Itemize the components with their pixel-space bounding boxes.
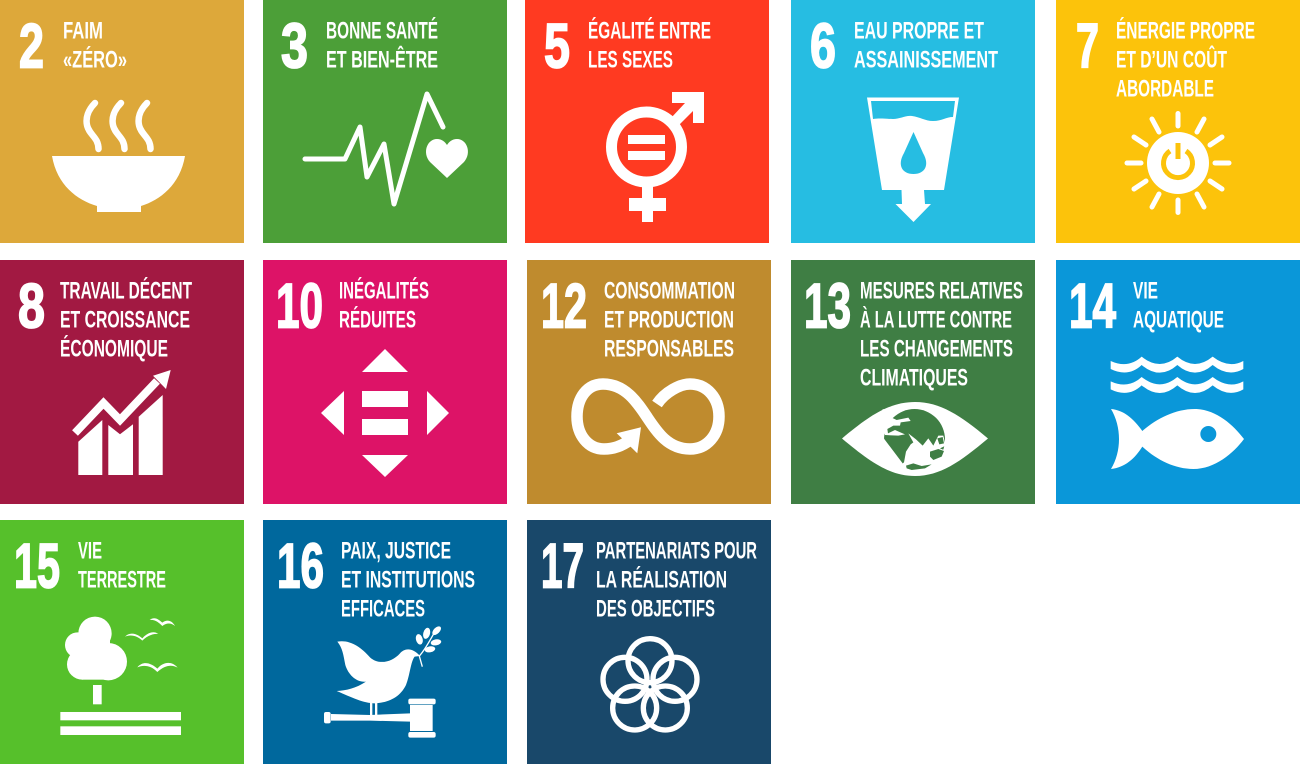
heading goal 17 (596, 538, 757, 622)
panel: goal 16 (263, 520, 507, 764)
heading goal 6: ASSAINISSEMENT (854, 46, 998, 74)
panel: goal 2 (0, 0, 244, 243)
icon: reduced inequalities arrows (321, 349, 449, 477)
panel: goal 17 (527, 520, 771, 764)
heading goal 12 (604, 278, 735, 362)
icon: heartbeat (305, 94, 468, 204)
panel: goal 8 (0, 260, 244, 504)
panel: goal 3 (263, 0, 507, 243)
heading goal 12: ET PRODUCTION (604, 306, 734, 334)
number 15: 15 (14, 532, 60, 602)
number 14: 14 (1069, 272, 1116, 342)
icon: growth chart (75, 370, 171, 475)
heading goal 13: À LA LUTTE CONTRE (860, 306, 1012, 334)
heading goal 17: PARTENARIATS POUR (596, 538, 757, 564)
icon: tree, birds and land (60, 617, 181, 735)
number 8: 8 (18, 272, 45, 342)
panel: goal 15 (0, 520, 244, 764)
panel: goal 10 (263, 260, 507, 504)
heading goal 15: TERRESTRE (78, 566, 166, 594)
heading goal 14: VIE (1133, 278, 1158, 304)
number 3: 3 (281, 12, 308, 82)
heading goal 2: FAIM (63, 18, 103, 44)
icon: interlocking rings (603, 639, 697, 730)
number 12: 12 (541, 272, 587, 342)
heading goal 15: VIE (78, 538, 102, 564)
heading goal 12: RESPONSABLES (604, 336, 734, 362)
heading goal 7: ABORDABLE (1116, 76, 1214, 102)
number 6: 6 (810, 12, 836, 82)
heading goal 6 (854, 18, 998, 74)
panel: goal 13 (791, 260, 1035, 504)
panel: goal 12 (527, 260, 771, 504)
heading goal 5: ÉGALITÉ ENTRE (588, 16, 711, 44)
heading goal 10: RÉDUITES (339, 306, 416, 334)
icon: eye with globe (842, 402, 988, 476)
heading goal 8: ET CROISSANCE (60, 306, 190, 334)
heading goal 13: MESURES RELATIVES (860, 278, 1023, 304)
heading goal 3: ET BIEN-ÊTRE (326, 46, 438, 74)
panel: goal 5 (525, 0, 769, 243)
icon: infinity loop arrow (577, 384, 719, 453)
heading goal 15 (78, 538, 166, 594)
heading goal 13: LES CHANGEMENTS (860, 336, 1013, 362)
icon: gender equality (612, 92, 704, 222)
heading goal 13 (860, 278, 1023, 392)
heading goal 12: CONSOMMATION (604, 278, 735, 304)
number 10: 10 (276, 272, 323, 342)
heading goal 14: AQUATIQUE (1133, 306, 1224, 334)
heading goal 3: BONNE SANTÉ (326, 16, 438, 44)
heading goal 8: ÉCONOMIQUE (60, 334, 168, 362)
heading goal 17: LA RÉALISATION (596, 566, 727, 594)
heading goal 16: ET INSTITUTIONS (341, 566, 475, 594)
panel: goal 14 (1056, 260, 1300, 504)
heading goal 6: EAU PROPRE ET (854, 18, 984, 44)
heading goal 2 (63, 18, 127, 74)
heading goal 2: «ZÉRO» (63, 46, 127, 74)
icon: soup bowl (52, 103, 185, 212)
heading goal 5 (588, 16, 711, 74)
heading goal 16 (341, 538, 475, 622)
icon: sun with power button (1127, 114, 1229, 212)
heading goal 10: INÉGALITÉS (339, 276, 429, 304)
heading goal 16: PAIX, JUSTICE (341, 538, 451, 564)
heading goal 10 (339, 276, 429, 334)
icon: dove and gavel (324, 625, 443, 738)
number 17: 17 (541, 532, 584, 602)
icon: waves and fish (1111, 357, 1244, 469)
number 2: 2 (19, 12, 44, 82)
heading goal 7: ET D’UN COÛT (1116, 46, 1227, 74)
number 7: 7 (1076, 12, 1099, 82)
heading goal 5: LES SEXES (588, 46, 673, 74)
panel: goal 7 (1056, 0, 1300, 243)
heading goal 7 (1116, 16, 1255, 102)
heading goal 8: TRAVAIL DÉCENT (60, 276, 192, 304)
heading goal 13: CLIMATIQUES (860, 364, 968, 392)
heading goal 14 (1133, 278, 1224, 334)
number 16: 16 (277, 532, 324, 602)
heading goal 16: EFFICACES (341, 596, 425, 622)
heading goal 8 (60, 276, 192, 362)
icon: water glass (867, 98, 959, 222)
heading goal 17: DES OBJECTIFS (596, 596, 715, 622)
number 5: 5 (544, 12, 570, 82)
number 13: 13 (804, 272, 851, 342)
heading goal 3 (326, 16, 438, 74)
panel: goal 6 (791, 0, 1035, 243)
